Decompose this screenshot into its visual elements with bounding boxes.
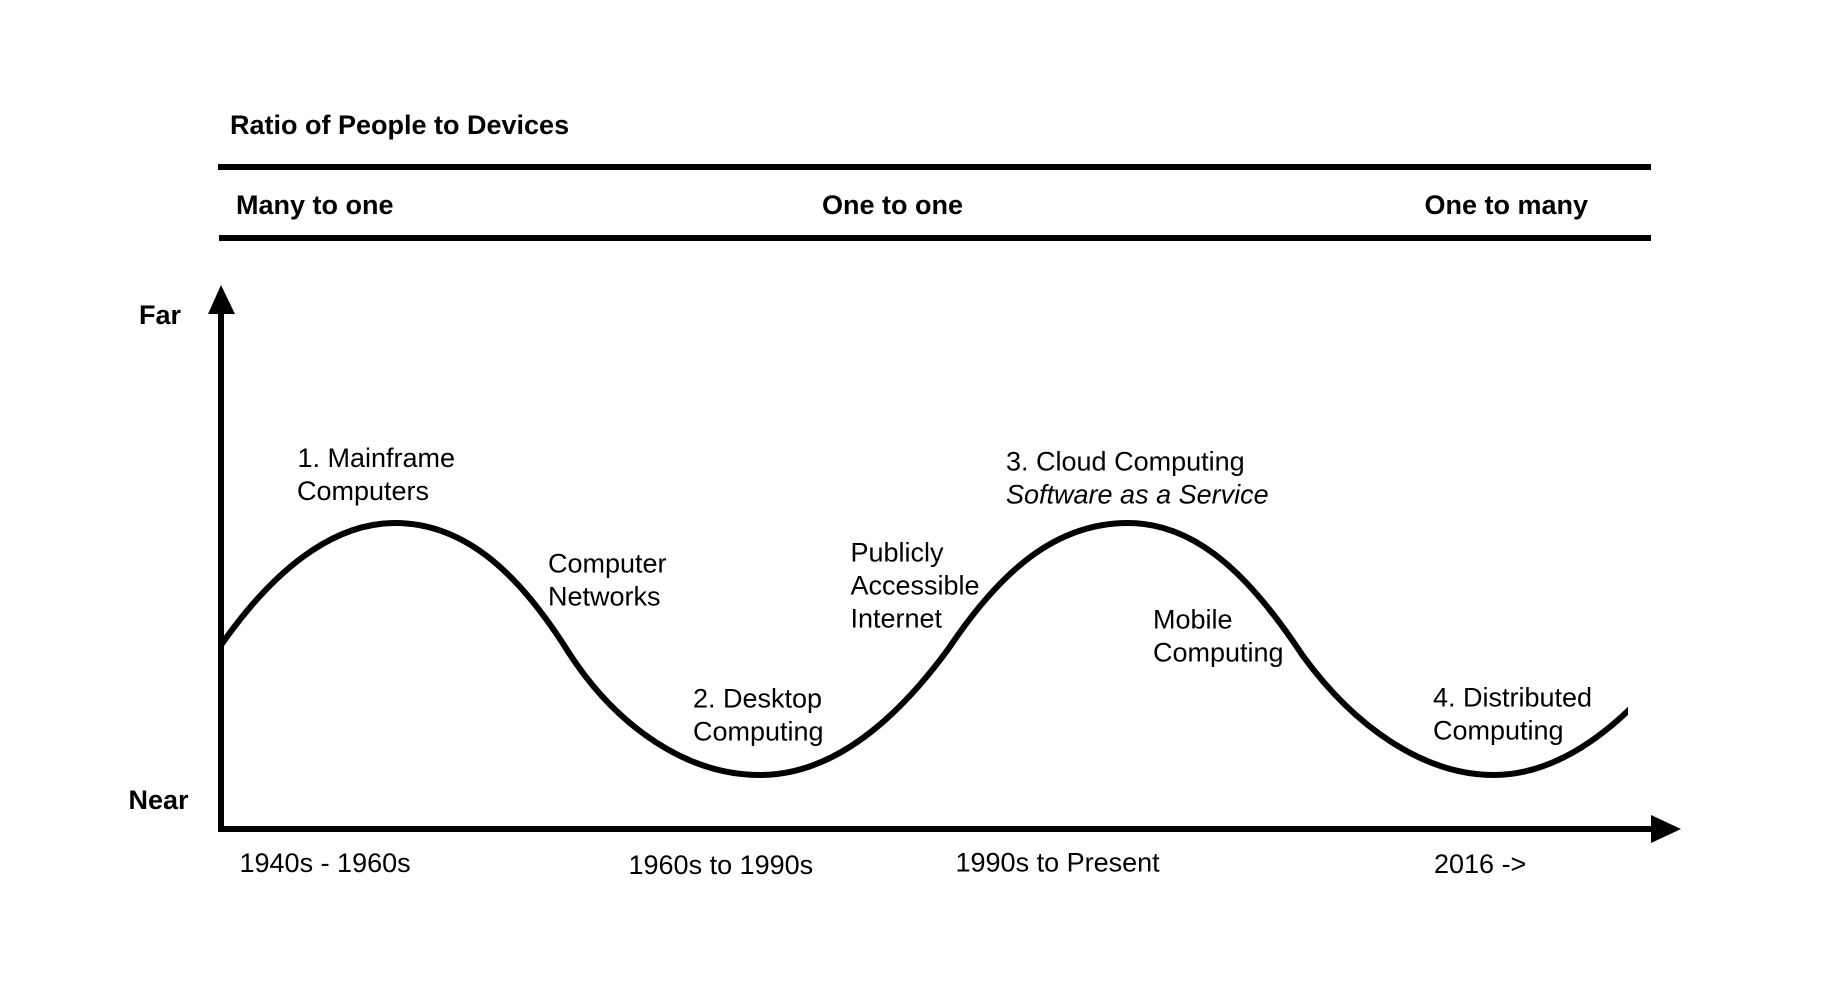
y axis arrow [208, 285, 235, 832]
label: cloud computing: 3. Cloud Computing [1006, 446, 1245, 476]
date: 1960s to 1990s: 1960s to 1990s [628, 850, 813, 880]
panel: ratio band [218, 164, 1651, 241]
label: distributed computing: 4. Distributed [1433, 682, 1592, 712]
date: 1940s to 1960s: 1940s - 1960s [240, 848, 411, 878]
label: computer networks: Networks [548, 582, 661, 612]
infographic [130, 114, 1681, 874]
label: computer networks: Computer [548, 548, 667, 578]
date: 1990s to present: 1990s to Present [956, 848, 1160, 878]
wave curve [219, 523, 1632, 775]
label: mainframe computers: Computers [297, 476, 429, 506]
label: publicly accessible internet: Internet [850, 604, 943, 634]
label: mobile computing: Mobile [1153, 604, 1233, 634]
title: Ratio of People to Devices [230, 110, 569, 140]
x axis arrow [218, 815, 1681, 843]
label: cloud computing: Software as a Service [1006, 480, 1269, 510]
label: publicly accessible internet: Publicly [850, 538, 944, 568]
label: mainframe computers: 1. Mainframe [298, 443, 455, 473]
label: desktop computing: Computing [693, 716, 824, 746]
y axis label: far: Far [139, 300, 182, 330]
label: mobile computing: Computing [1153, 638, 1284, 668]
label: desktop computing: 2. Desktop [693, 684, 822, 714]
label: publicly accessible internet: Accessible [850, 570, 980, 600]
label: one to one: One to one [822, 190, 963, 220]
label: distributed computing: Computing [1433, 716, 1564, 746]
label: one to many: One to many [1424, 190, 1588, 220]
label: many to one: Many to one [236, 190, 394, 220]
date: 2016 onward: 2016 -> [1434, 849, 1526, 879]
y axis label: near: Near [128, 785, 189, 815]
